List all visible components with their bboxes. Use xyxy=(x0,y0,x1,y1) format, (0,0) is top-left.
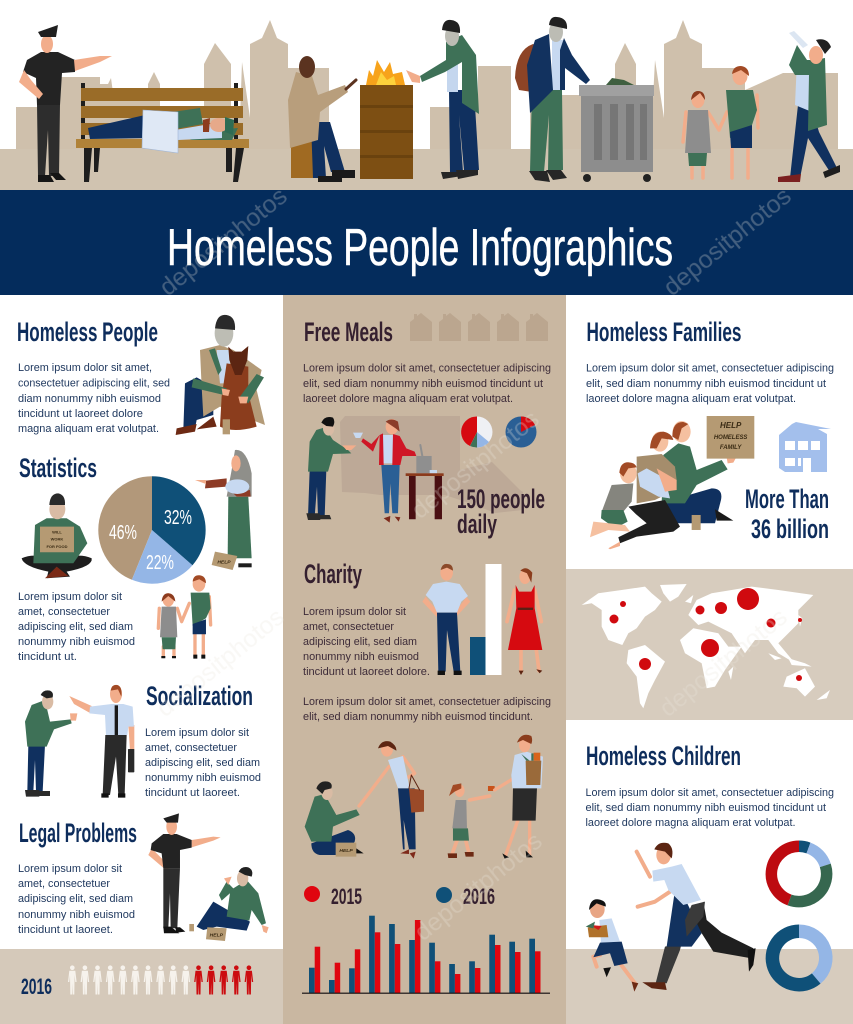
bar chart: charity xyxy=(470,564,502,675)
middle: charity text: amet, consectetuer xyxy=(303,621,394,633)
watermarks: depositphotos xyxy=(406,405,545,525)
illustration: man chasing child xyxy=(586,843,756,992)
illustration: sitting man with sign xyxy=(22,493,92,578)
panel: middle column background xyxy=(283,295,566,1024)
pie chart: statistics: 46% xyxy=(109,522,137,544)
left: socialization text: Lorem ipsum dolor sit xyxy=(145,727,250,739)
left: 2016 label: 2016 xyxy=(21,974,52,999)
middle: free meals text: elit, sed diam nonummy nibh euismod tincidunt ut xyxy=(303,378,544,390)
skyline xyxy=(0,20,853,190)
pie chart: blue share xyxy=(506,416,536,448)
right: homeless families heading: Homeless Families xyxy=(586,317,742,347)
legend: 2016: 2016 xyxy=(463,884,495,909)
illustration: sitting man and woman giving: HELP xyxy=(339,848,353,854)
illustration: homeless family xyxy=(590,416,754,549)
illustration: police and sitting man: HELP xyxy=(210,933,224,939)
illustration: socialization figures xyxy=(25,685,134,798)
illustration: table with pot xyxy=(406,445,444,519)
middle: second paragraph xyxy=(303,696,551,723)
illustration: bench with sleeping man xyxy=(76,83,249,182)
left: homeless people text xyxy=(18,362,170,435)
pie chart: red share xyxy=(461,416,492,448)
illustration: burning barrel xyxy=(360,60,413,179)
donut chart: lower xyxy=(772,931,826,985)
panel: right bottom band xyxy=(566,949,853,1024)
illustration: two children xyxy=(158,575,211,659)
panel: left bottom band xyxy=(0,949,283,1024)
middle: charity heading: Charity xyxy=(304,559,362,589)
illustration: woman with baby xyxy=(195,450,252,570)
icon: row of houses xyxy=(410,313,548,341)
world map with red dots xyxy=(582,584,830,708)
left: homeless people text: diam nonummy nibh euismod xyxy=(18,393,161,405)
right: homeless families text: Lorem ipsum dolor sit amet, consectetuer adipiscing xyxy=(586,362,834,374)
illustration: man drinking from bottle xyxy=(778,31,840,182)
middle: free meals text: Lorem ipsum dolor sit amet, consectetuer adipiscing xyxy=(303,362,551,374)
illustration: woman with baby: HELP xyxy=(217,559,231,565)
middle: charity text: nonummy nibh euismod xyxy=(303,651,419,663)
illustration: sitting man with sign: FOR FOOD xyxy=(46,544,68,549)
middle: charity text: adipiscing elit, sed diam xyxy=(303,636,417,648)
left: socialization text: nonummy nibh euismod xyxy=(145,772,261,784)
illustration: man with dog xyxy=(176,315,265,435)
illustration: sitting man and woman giving xyxy=(305,741,424,859)
middle: charity text xyxy=(303,606,430,678)
panel: right map band xyxy=(566,569,853,720)
illustration: police officer pointing xyxy=(19,25,112,182)
left: statistics text: tincidunt ut. xyxy=(18,651,77,663)
donut chart: upper xyxy=(771,846,827,902)
illustration: sitting man with sign: WILL xyxy=(52,529,62,534)
watermarks: depositphotos xyxy=(154,182,293,302)
illustration: homeless family: FAMILY xyxy=(720,445,742,451)
middle: second paragraph: Lorem ipsum dolor sit amet, consectetuer adipiscing xyxy=(303,696,551,708)
bar chart: 2015 vs 2016 xyxy=(302,916,550,994)
middle: free meals heading: Free Meals xyxy=(304,317,393,347)
illustration: police and sitting man xyxy=(148,813,269,941)
left: statistics text: nonummy nibh euismod xyxy=(18,636,135,648)
left: homeless people text: tincidunt ut laoreet dolore xyxy=(18,408,143,420)
right: homeless children text: laoreet dolore magna aliquam erat volutpat. xyxy=(586,817,796,829)
right: homeless children text xyxy=(586,787,834,829)
middle: free meals text xyxy=(303,362,551,405)
illustration: woman serving soup xyxy=(353,419,416,523)
watermarks: depositphotos xyxy=(654,603,793,723)
middle: 150 people daily: 150 people xyxy=(457,484,545,514)
illustration: two children holding hands xyxy=(683,66,758,178)
watermarks xyxy=(151,182,797,947)
right: homeless children text: elit, sed diam nonummy nibh euismod tincidunt ut xyxy=(586,802,827,814)
pie chart: statistics: 32% xyxy=(164,507,192,529)
illustration: man with hands on hips xyxy=(422,564,470,675)
legend: 2016 xyxy=(436,884,495,909)
right: homeless families text: elit, sed diam nonummy nibh euismod tincidunt ut xyxy=(586,378,827,390)
left: legal problems text xyxy=(18,863,135,936)
watermarks: depositphotos xyxy=(409,827,548,947)
left: socialization text: amet, consectetuer xyxy=(145,742,237,754)
left: socialization text: tincidunt ut laoreet. xyxy=(145,787,240,799)
middle: free meals text: laoreet dolore magna aliquam erat volutpat. xyxy=(303,393,513,405)
title banner xyxy=(0,190,853,295)
watermarks: depositphotos xyxy=(658,182,797,302)
right: more than 36 billion xyxy=(745,484,829,544)
title: Homeless People Infographics xyxy=(167,219,673,277)
left: statistics text xyxy=(18,591,135,663)
left: socialization text: adipiscing elit, sed diam xyxy=(145,757,260,769)
middle: charity text: tincidunt ut laoreet dolore. xyxy=(303,666,430,678)
illustration: man receiving soup xyxy=(306,417,356,520)
left: legal problems heading: Legal Problems xyxy=(19,818,137,848)
illustration: woman in red dress xyxy=(507,568,542,675)
left: statistics text: Lorem ipsum dolor sit xyxy=(18,591,123,603)
illustration: child and woman with groceries xyxy=(448,735,543,859)
right: homeless families text xyxy=(586,362,834,405)
left: legal problems text: Lorem ipsum dolor sit xyxy=(18,863,123,875)
pie chart: statistics xyxy=(98,476,206,584)
left: legal problems text: tincidunt ut laoreet. xyxy=(18,924,113,936)
right: homeless children text: Lorem ipsum dolor sit amet, consectetuer adipiscing xyxy=(586,787,834,799)
illustration: sitting man with sign: WORK xyxy=(51,537,63,542)
left: legal problems text: nonummy nibh euismod xyxy=(18,909,135,921)
left: homeless people text: consectetuer adipiscing elit, sed xyxy=(18,378,170,390)
illustration: homeless family: HELP xyxy=(720,421,742,430)
right: homeless children heading: Homeless Children xyxy=(586,741,741,771)
left: statistics heading: Statistics xyxy=(19,453,97,483)
illustration: trash can xyxy=(579,78,654,182)
left: socialization text xyxy=(145,727,261,799)
left: homeless people text: Lorem ipsum dolor sit amet, xyxy=(18,362,152,374)
left: socialization heading: Socialization xyxy=(146,681,253,711)
left: legal problems text: adipiscing elit, sed diam xyxy=(18,893,133,905)
middle: 150 people daily: daily xyxy=(457,509,497,539)
illustration: standing man warming hands xyxy=(406,20,479,179)
illustration: seated man at fire xyxy=(288,56,356,182)
left: legal problems text: amet, consectetuer xyxy=(18,878,110,890)
pictogram: 10 of 15 white and 5 red people xyxy=(68,965,253,994)
left: statistics text: adipiscing elit, sed diam xyxy=(18,621,133,633)
middle: charity text: Lorem ipsum dolor sit xyxy=(303,606,407,618)
left: statistics text: amet, consectetuer xyxy=(18,606,110,618)
middle: second paragraph: elit, sed diam nonummy nibh euismod tincidunt. xyxy=(303,711,533,723)
middle: 150 people daily xyxy=(457,484,545,539)
left: homeless people text: magna aliquam erat volutpat. xyxy=(18,423,159,435)
illustration: homeless family: HOMELESS xyxy=(714,435,747,441)
illustration: man with backpack at trash can xyxy=(515,17,590,182)
right: homeless families text: laoreet dolore magna aliquam erat volutpat. xyxy=(586,393,796,405)
map silhouette behind soup kitchen xyxy=(340,416,523,513)
left: homeless people heading: Homeless People xyxy=(17,317,158,347)
legend: 2015: 2015 xyxy=(331,884,362,909)
pie chart: statistics: 22% xyxy=(146,552,174,574)
legend: 2015 xyxy=(304,884,362,909)
ground strip xyxy=(0,149,853,190)
icon: house xyxy=(779,422,831,472)
watermarks: depositphotos xyxy=(151,603,290,723)
